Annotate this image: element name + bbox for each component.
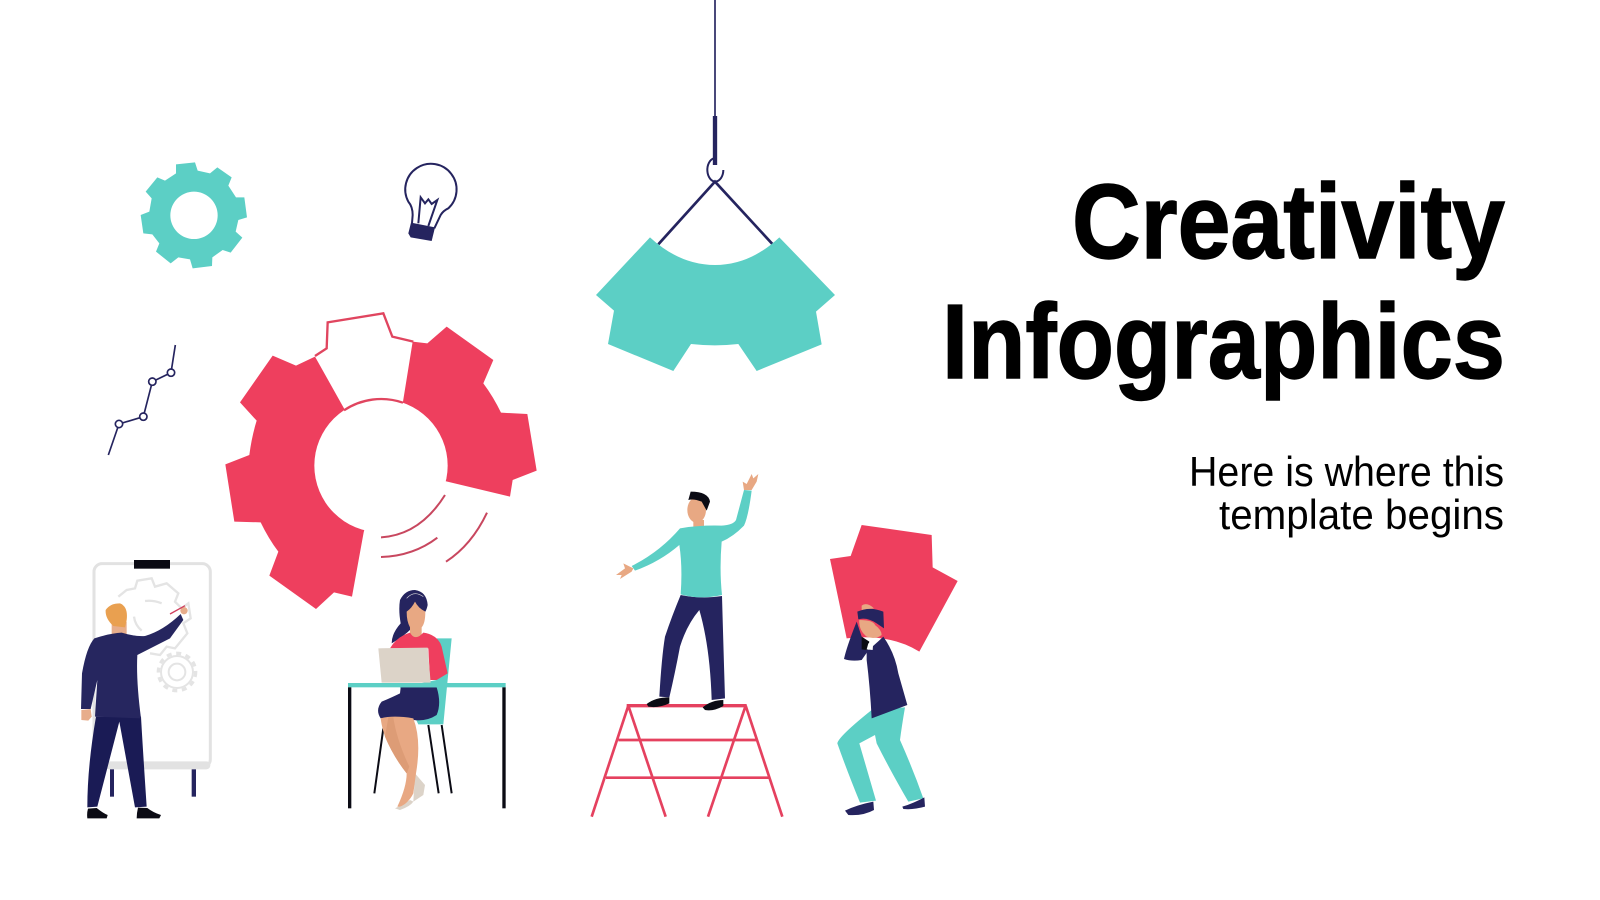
crane cable and hook [658,0,773,244]
desk [348,683,506,808]
carrying man [837,604,925,815]
title [942,163,1505,401]
man on ladder [592,474,782,817]
red gear piece [830,525,958,652]
subtitle: template begins [1219,491,1504,538]
motion arcs [381,495,487,562]
hanging teal gear piece [596,0,835,371]
chair [374,638,452,793]
title: Creativity [1072,163,1505,281]
right gear segment [381,327,537,497]
icon: small teal gear [141,162,247,268]
red ladder [592,706,782,817]
standing man [616,474,758,710]
subtitle: Here is where this [1189,448,1504,495]
big red gear with missing tooth [225,313,537,609]
woman at desk with laptop [348,590,506,810]
laptop [378,648,431,683]
icon: line chart [108,345,175,455]
missing tooth outline [315,313,413,410]
subtitle [1189,448,1504,538]
gear hole [314,399,448,532]
teal gear segment [596,237,835,371]
whiteboard [94,560,210,797]
left gear segment [225,356,381,609]
icon: light bulb [405,164,457,241]
man carrying red gear piece [830,525,958,815]
whiteboard man [81,560,210,818]
title: Infographics [942,283,1505,401]
woman figure [378,590,448,810]
man figure [81,603,188,818]
